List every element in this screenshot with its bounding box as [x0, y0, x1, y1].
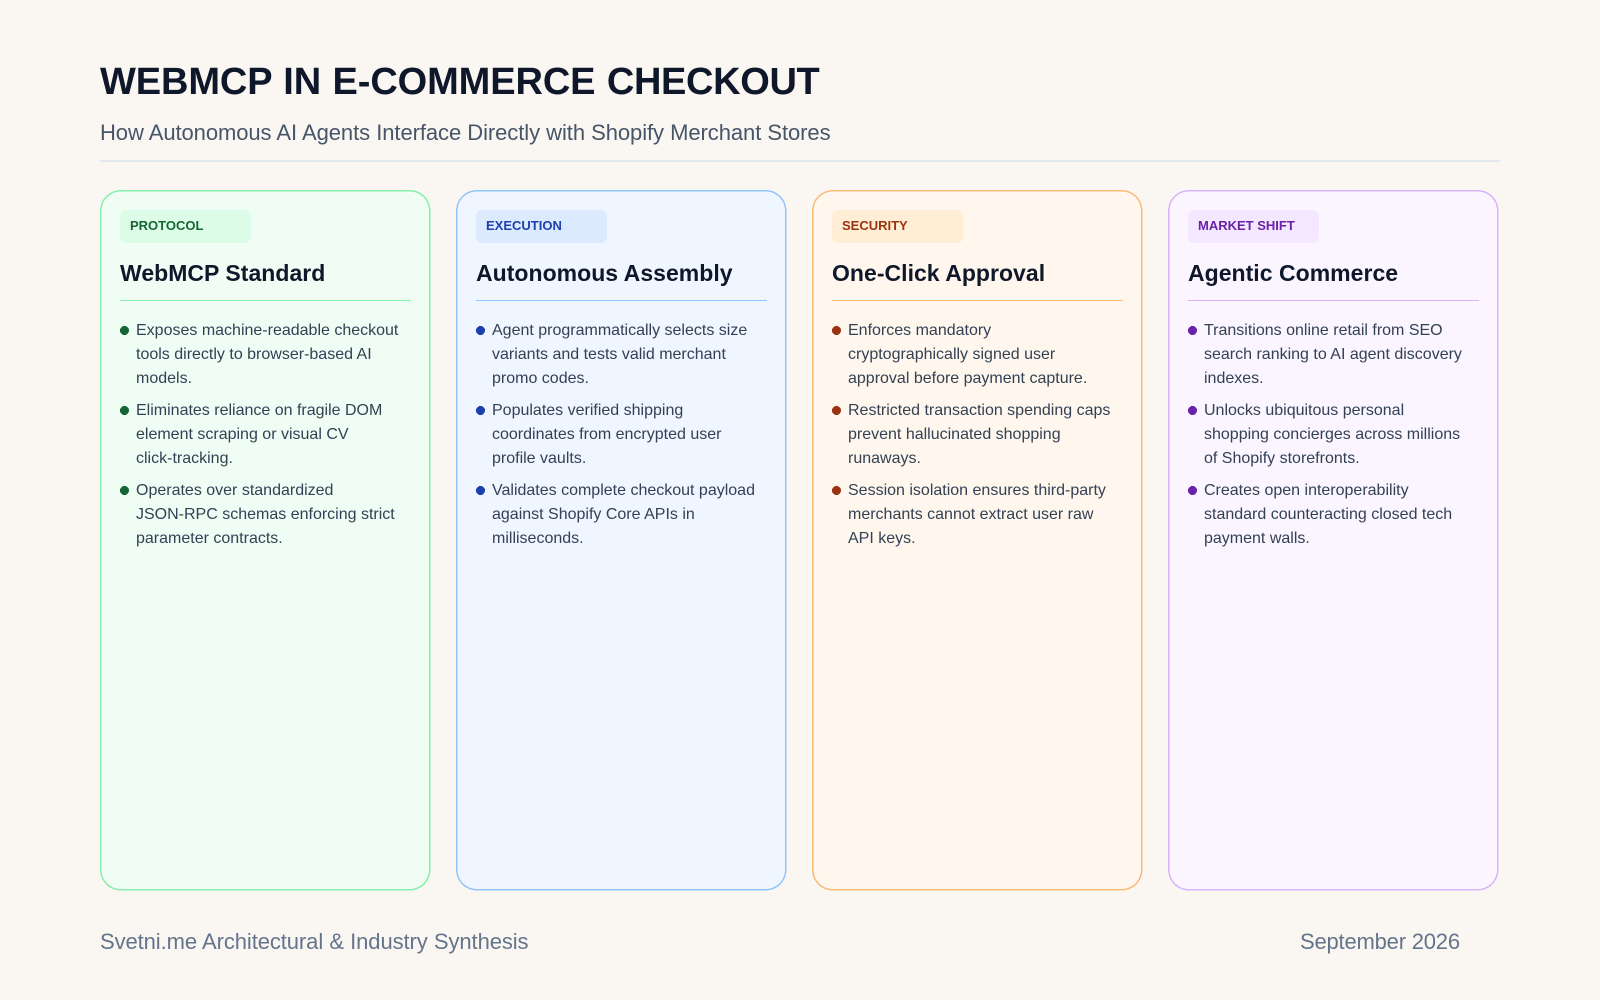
bullet 2: runaways. [848, 450, 921, 467]
bullet 2 [1188, 402, 1460, 467]
bullet 2: click-tracking. [136, 450, 233, 467]
bullet 1: promo codes. [492, 370, 589, 387]
bullet 2: coordinates from encrypted user [492, 426, 721, 443]
bullet 3: standard counteracting closed tech [1204, 506, 1452, 523]
bullet 1 [120, 322, 398, 387]
bullet 3: Creates open interoperability [1204, 482, 1409, 499]
heading: One-Click Approval: One-Click Approval [832, 260, 1045, 286]
bullet 1 [832, 322, 1087, 387]
bullet list: security [832, 322, 1110, 547]
tag: execution: EXECUTION [486, 218, 562, 233]
bullet 1: Exposes machine-readable checkout [136, 322, 398, 339]
bullet 1: search ranking to AI agent discovery [1204, 346, 1462, 363]
bullet 3: Session isolation ensures third-party [848, 482, 1106, 499]
title: WEBMCP IN E-COMMERCE CHECKOUT [100, 61, 819, 103]
bullet 3: JSON-RPC schemas enforcing strict [136, 506, 395, 523]
bullet 1 [476, 322, 747, 387]
panel: execution [456, 190, 786, 890]
panel: security [812, 190, 1142, 890]
heading: Autonomous Assembly: Autonomous Assembly [476, 260, 733, 286]
heading: Agentic Commerce: Agentic Commerce [1188, 260, 1398, 286]
panel: market shift [1168, 190, 1498, 890]
tag: execution [476, 210, 607, 243]
bullet 2: Populates verified shipping [492, 402, 683, 419]
bullet 3 [476, 482, 755, 547]
bullet 1: cryptographically signed user [848, 346, 1055, 363]
bullet 3 [1188, 482, 1452, 547]
bullet 3: Operates over standardized [136, 482, 333, 499]
tag: protocol [120, 210, 251, 243]
bullet 3 [832, 482, 1106, 547]
bullet 2: Eliminates reliance on fragile DOM [136, 402, 382, 419]
bullet 2: of Shopify storefronts. [1204, 450, 1360, 467]
panel: protocol [100, 190, 430, 890]
bullet 1: variants and tests valid merchant [492, 346, 726, 363]
bullet 1: Transitions online retail from SEO [1204, 322, 1443, 339]
bullet 3: payment walls. [1204, 530, 1310, 547]
tag: market shift [1188, 210, 1319, 243]
bullet 1: indexes. [1204, 370, 1264, 387]
bullet 3: merchants cannot extract user raw [848, 506, 1093, 523]
bullet 3: API keys. [848, 530, 916, 547]
bullet 1: approval before payment capture. [848, 370, 1087, 387]
bullet 2: prevent hallucinated shopping [848, 426, 1061, 443]
bullet 3: parameter contracts. [136, 530, 283, 547]
bullet 2 [832, 402, 1110, 467]
bullet 2: Restricted transaction spending caps [848, 402, 1110, 419]
bullet 2: shopping concierges across millions [1204, 426, 1460, 443]
bullet 2: Unlocks ubiquitous personal [1204, 402, 1404, 419]
bullet list: protocol [120, 322, 398, 547]
tag: market shift: MARKET SHIFT [1198, 218, 1295, 233]
bullet list: market shift [1188, 322, 1462, 547]
footer: source: Svetni.me Architectural & Industry Synthesis [100, 929, 528, 954]
bullet 2: element scraping or visual CV [136, 426, 349, 443]
bullet 3: against Shopify Core APIs in [492, 506, 695, 523]
bullet 2 [476, 402, 722, 467]
bullet 3: milliseconds. [492, 530, 584, 547]
bullet 1: Agent programmatically selects size [492, 322, 747, 339]
tag: protocol: PROTOCOL [130, 218, 203, 233]
bullet 3 [120, 482, 395, 547]
bullet list: execution [476, 322, 755, 547]
bullet 1: Enforces mandatory [848, 322, 991, 339]
bullet 1: models. [136, 370, 192, 387]
bullet 1: tools directly to browser-based AI [136, 346, 372, 363]
bullet 1 [1188, 322, 1462, 387]
bullet 2 [120, 402, 382, 467]
subtitle: How Autonomous AI Agents Interface Directly with Shopify Merchant Stores [100, 120, 831, 145]
bullet 2: profile vaults. [492, 450, 586, 467]
heading: WebMCP Standard: WebMCP Standard [120, 260, 325, 286]
footer: date: September 2026 [1300, 929, 1460, 954]
tag: security: SECURITY [842, 218, 908, 233]
bullet 3: Validates complete checkout payload [492, 482, 755, 499]
tag: security [832, 210, 963, 243]
